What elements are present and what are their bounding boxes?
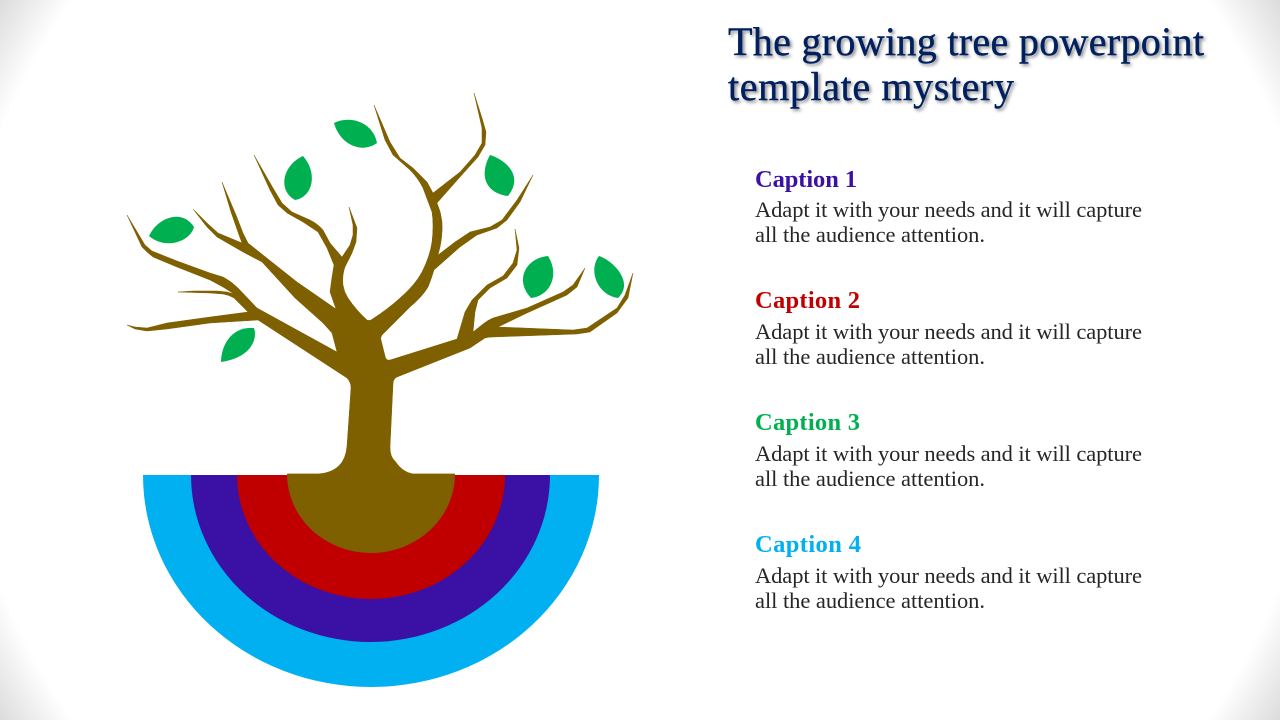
leaf 7 xyxy=(594,256,624,298)
caption 3 body xyxy=(755,441,1142,491)
title: template mystery xyxy=(728,64,1014,109)
leaves xyxy=(149,120,624,362)
caption block 4 xyxy=(755,531,1142,613)
leaf 2 xyxy=(284,156,312,200)
leaf 3 xyxy=(334,120,377,148)
caption 3 body: Adapt it with your needs and it will capture xyxy=(755,441,1142,466)
ring: red xyxy=(237,475,505,599)
semicircle rings and tree xyxy=(127,93,633,687)
caption 1 heading: Caption 1 xyxy=(755,166,857,193)
leaf 1 xyxy=(149,217,194,243)
caption 2 body xyxy=(755,319,1142,369)
caption 2 body: Adapt it with your needs and it will capture xyxy=(755,319,1142,344)
caption 1 body xyxy=(755,197,1142,247)
ring: purple xyxy=(191,475,550,642)
caption 4 body xyxy=(755,563,1142,613)
caption 4 body: Adapt it with your needs and it will capture xyxy=(755,563,1142,588)
caption 1 body: Adapt it with your needs and it will capture xyxy=(755,197,1142,222)
leaf 4 xyxy=(221,328,255,362)
leaf 6 xyxy=(523,256,553,298)
caption block 1 xyxy=(755,166,1142,247)
caption 2 body: all the audience attention. xyxy=(755,344,985,369)
title: The growing tree powerpoint xyxy=(728,19,1204,64)
leaf 5 xyxy=(485,155,514,196)
title xyxy=(728,19,1204,109)
ring: brown root core xyxy=(287,474,455,553)
caption block 2 xyxy=(755,287,1142,369)
caption 3 body: all the audience attention. xyxy=(755,466,985,491)
caption 1 body: all the audience attention. xyxy=(755,222,985,247)
caption 4 heading: Caption 4 xyxy=(755,531,861,558)
caption 2 heading: Caption 2 xyxy=(755,287,860,314)
caption 4 body: all the audience attention. xyxy=(755,588,985,613)
caption block 3 xyxy=(755,409,1142,491)
ring: blue outer xyxy=(143,475,599,687)
tree trunk and branches xyxy=(127,93,633,474)
caption 3 heading: Caption 3 xyxy=(755,409,860,436)
